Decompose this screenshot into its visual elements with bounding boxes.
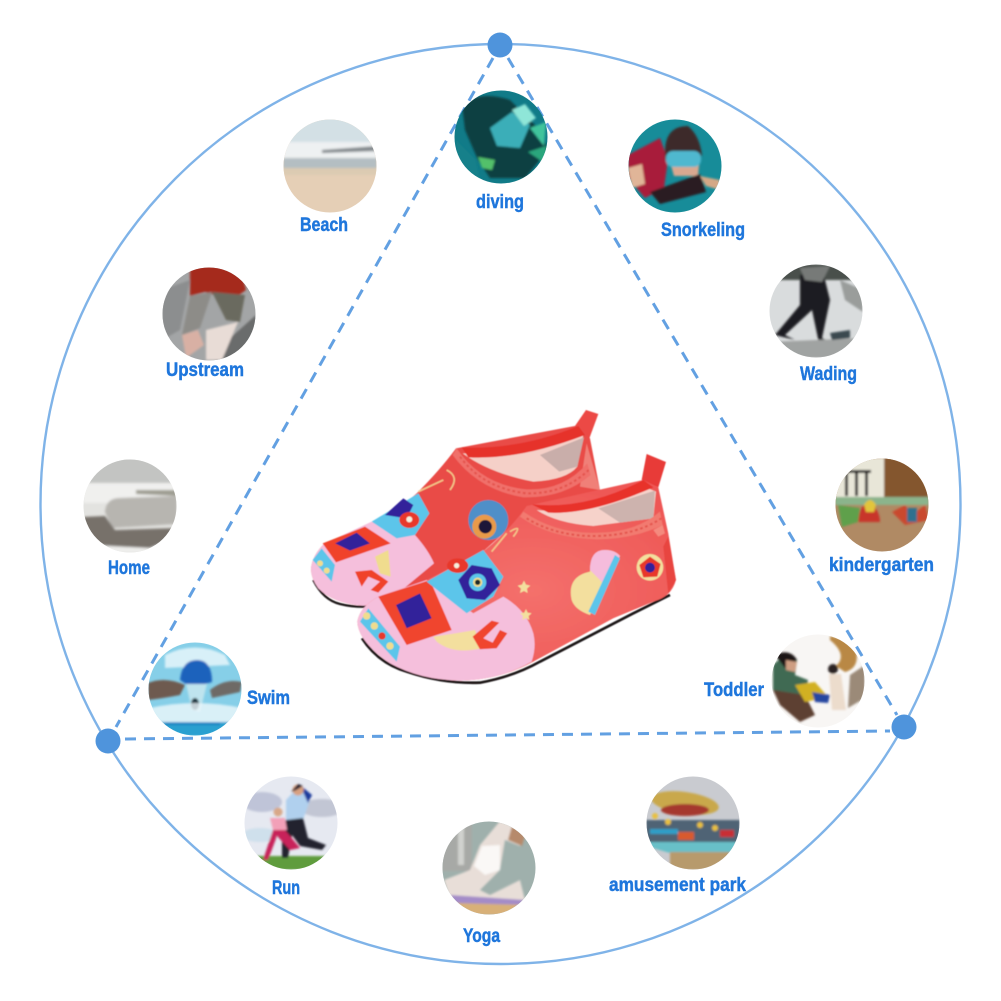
photo: wading: [769, 264, 863, 358]
photo: diving: [454, 90, 548, 184]
back shoe: [311, 410, 600, 607]
label: kindergarten: kindergarten: [829, 555, 934, 576]
product: pair of water shoes: [311, 410, 676, 683]
photo: kindergarten: [835, 458, 929, 552]
photo: snorkeling: [628, 119, 722, 213]
label: Swim: Swim: [247, 688, 290, 709]
labels: [108, 192, 934, 947]
photo: swim: [148, 642, 242, 736]
label: amusement park: amusement park: [609, 875, 746, 896]
label: Snorkeling: Snorkeling: [661, 220, 745, 241]
photo: beach: [283, 115, 377, 213]
photo: upstream: [162, 266, 256, 361]
photo: toddler: [771, 634, 865, 728]
photo: home: [83, 455, 177, 553]
photo: run: [242, 776, 344, 870]
label: Toddler: Toddler: [704, 680, 765, 701]
label: Yoga: Yoga: [463, 926, 500, 947]
photo: amusement park: [646, 776, 740, 870]
label: Home: Home: [108, 558, 150, 579]
label: Beach: Beach: [300, 215, 348, 236]
label: Run: Run: [272, 878, 300, 899]
label: Wading: Wading: [800, 364, 857, 385]
front shoe: [357, 454, 676, 683]
label: diving: diving: [476, 192, 524, 213]
photo: yoga: [442, 821, 536, 915]
dashed triangle: [116, 58, 897, 739]
triangle vertex nodes: [96, 32, 916, 754]
label: Upstream: Upstream: [166, 360, 244, 381]
